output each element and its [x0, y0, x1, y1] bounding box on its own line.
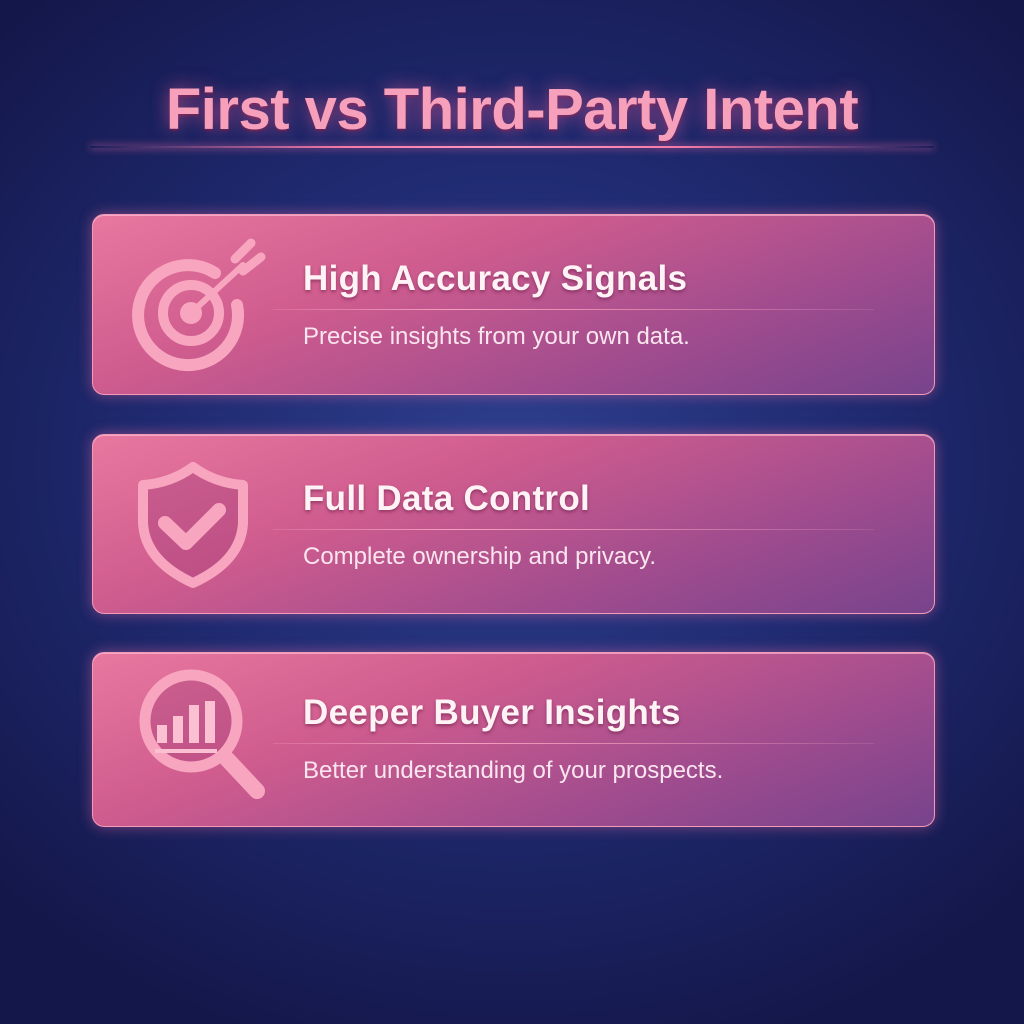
- title: First vs Third-Party Intent: [166, 77, 858, 142]
- icon: magnifier chart: [140, 670, 265, 799]
- text: Better understanding of your prospects.: [303, 757, 723, 784]
- panel: buyer insights: [92, 652, 935, 827]
- icon: shield: [138, 462, 248, 588]
- heading: Deeper Buyer Insights: [303, 693, 681, 732]
- icon: target: [132, 238, 266, 372]
- text: Precise insights from your own data.: [303, 323, 690, 350]
- heading: High Accuracy Signals: [303, 259, 687, 298]
- text: Complete ownership and privacy.: [303, 543, 656, 570]
- panel: data control: [92, 434, 935, 614]
- panel: high accuracy: [92, 214, 935, 395]
- heading: Full Data Control: [303, 479, 590, 518]
